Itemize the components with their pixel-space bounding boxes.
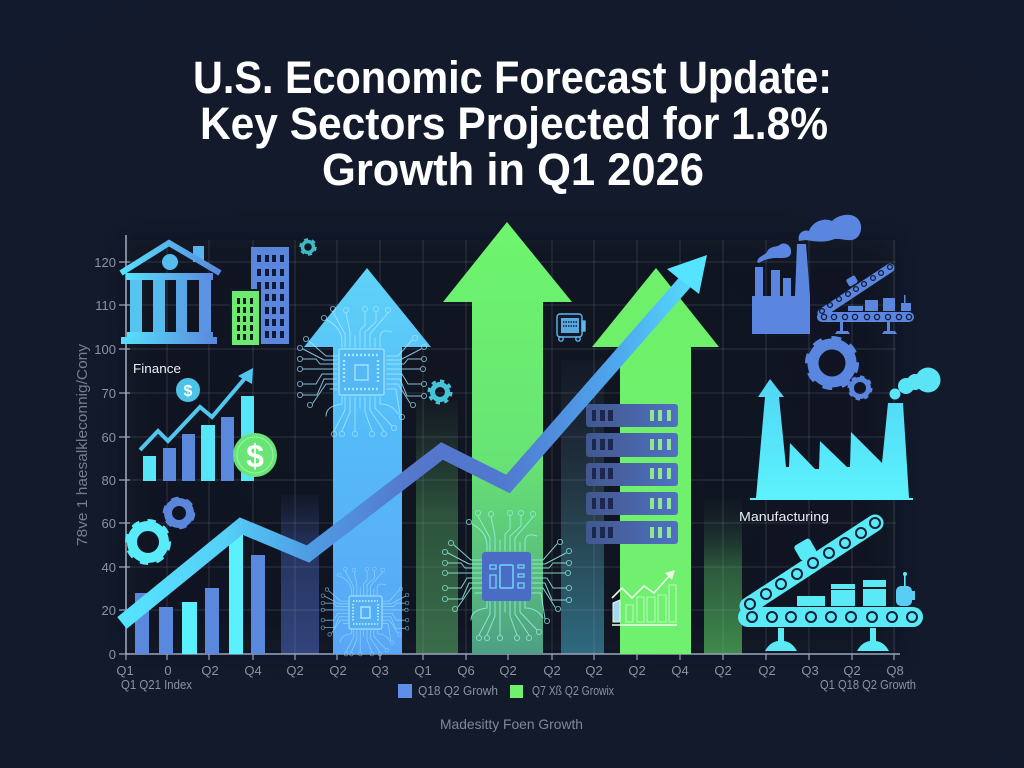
icon: green building [230, 289, 261, 345]
x axis labels: Q2 [585, 663, 603, 678]
legend: Q7 Xß Q2 Growix [532, 683, 614, 698]
x axis labels: Q1 [414, 663, 432, 678]
y axis labels: 100 [94, 342, 116, 357]
icon: green dollar coin [233, 433, 277, 477]
main trend line [122, 255, 707, 623]
dim bar: navy [281, 495, 319, 654]
icon: large cyan gear [128, 522, 168, 562]
server row 1 [586, 404, 678, 427]
icon: blue conveyor [817, 265, 914, 334]
finance trend arrow [140, 368, 253, 450]
y axis labels: 60 [102, 516, 116, 531]
x axis labels: Q2 [714, 663, 732, 678]
x axis labels [116, 663, 904, 678]
x axis labels: Q2 [543, 663, 561, 678]
icon: blue tower [251, 247, 289, 344]
server row 3 [586, 463, 678, 486]
y axis labels: 70 [102, 386, 116, 401]
arrow: blue technology [304, 268, 431, 654]
icon: cyan conveyor [738, 518, 923, 651]
title: Key Sectors Projected for 1.8% [200, 98, 828, 149]
dim bar: dark green [416, 400, 458, 654]
title: Growth in Q1 2026 [322, 144, 704, 195]
icon: small blue gear [849, 377, 871, 399]
icon: large blue gear [808, 339, 856, 387]
x axis labels: Q8 [886, 663, 904, 678]
y axis labels [94, 255, 116, 662]
y axis labels: 0 [109, 647, 116, 662]
y axis labels: 60 [102, 430, 116, 445]
smoke large [799, 215, 861, 242]
icon: device [557, 314, 585, 341]
axis caption right: Q1 Q18 Q2 Growth [820, 677, 916, 692]
x axis labels: Q2 [201, 663, 219, 678]
icon: bank [121, 243, 220, 344]
smoke small [757, 244, 791, 263]
dim bar: teal [561, 360, 604, 654]
icon: small teal gear [429, 381, 451, 403]
axis caption left: Q1 Q21 Index [121, 677, 192, 692]
arrow: green tall [443, 222, 572, 654]
mini chart on green arrow [612, 570, 677, 625]
icon: small dollar coin [176, 378, 200, 402]
x axis labels: Q6 [457, 663, 475, 678]
icon: small gear top [300, 240, 316, 254]
y axis labels: 80 [102, 473, 116, 488]
y axis title: 78ve 1 haesalkleconnig/Cony [74, 343, 91, 546]
x axis labels: Q3 [801, 663, 819, 678]
dim bar: right green [704, 500, 742, 654]
legend [398, 683, 614, 698]
x axis labels: Q2 [843, 663, 861, 678]
x axis labels: Q2 [758, 663, 776, 678]
x axis labels: 0 [164, 663, 172, 678]
chip: on blue arrow head [297, 306, 427, 437]
title [193, 52, 832, 195]
finance mini bar chart [143, 396, 254, 481]
title: U.S. Economic Forecast Update: [193, 52, 832, 103]
x axis labels: Q2 [628, 663, 646, 678]
y axis labels: 40 [102, 560, 116, 575]
label: Manufacturing: Manufacturing [739, 509, 829, 524]
left bar chart [135, 533, 265, 654]
server row 5 [586, 521, 678, 544]
server row 2 [586, 433, 678, 457]
chip: on green arrow [442, 510, 572, 641]
arrow: green right [592, 268, 719, 654]
chart axes [119, 235, 900, 660]
x axis labels: Q3 [371, 663, 389, 678]
x axis labels: Q2 [286, 663, 304, 678]
icon: blue gear [165, 499, 193, 527]
footer caption: Madesitty Foen Growth [440, 716, 583, 732]
y axis labels: 120 [94, 255, 116, 270]
x axis labels: Q2 [329, 663, 347, 678]
x axis labels: Q1 [116, 663, 134, 678]
icon: green dollar coin: $ [246, 438, 264, 474]
x axis labels: Q4 [244, 663, 262, 678]
icon: cyan factory [750, 368, 940, 500]
label: Finance: Finance [133, 361, 181, 376]
legend: Q18 Q2 Growh [418, 683, 498, 698]
server row 4 [586, 492, 678, 515]
server stack [586, 404, 678, 544]
x axis labels: Q4 [671, 663, 689, 678]
x axis labels: Q2 [499, 663, 517, 678]
chip: on blue arrow base [321, 567, 409, 656]
icon: blue factory [752, 215, 861, 334]
y axis labels: 20 [102, 603, 116, 618]
icon: small dollar coin: $ [184, 383, 193, 400]
y axis labels: 110 [95, 298, 116, 313]
